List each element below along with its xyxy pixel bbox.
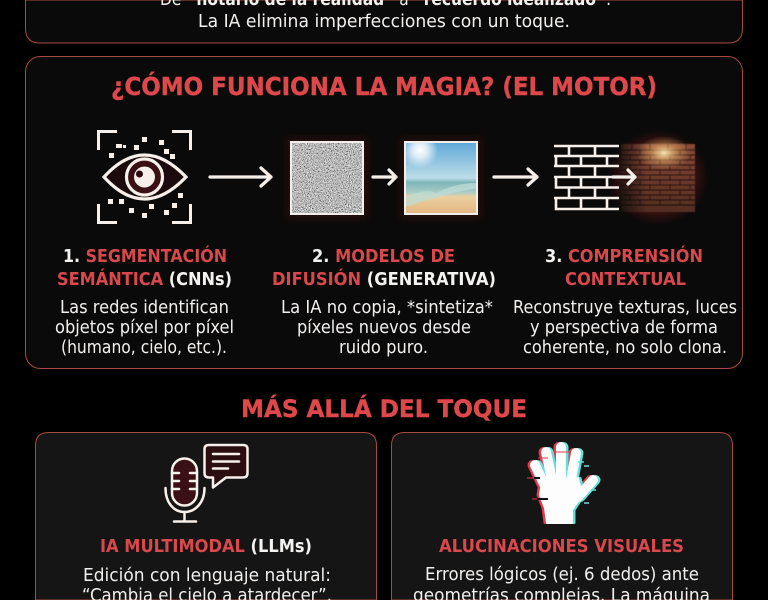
multimodal description: Edición con lenguaje natural: (83, 566, 331, 586)
heading: how it works: ¿CÓMO FUNCIONA LA MAGIA? (EL MOTOR) (111, 71, 657, 101)
step 3 description: coherente, no solo clona. (523, 338, 727, 358)
step 2 heading (272, 247, 496, 290)
step 2 description (281, 298, 493, 358)
panel: visual hallucinations (392, 432, 732, 600)
arrow: noise to beach (373, 170, 396, 184)
hallucinations description (413, 565, 710, 600)
step 2 description: La IA no copia, *sintetiza* (281, 298, 493, 318)
step 1 description (55, 298, 234, 358)
step 1 description: objetos píxel por píxel (55, 318, 234, 338)
hallucinations heading: ALUCINACIONES VISUALES (439, 537, 684, 557)
icon: microphone and speech bubble (166, 445, 248, 522)
arrow: beach to bricks (494, 169, 537, 185)
panel: how the magic works (26, 56, 742, 368)
step 3: contextual understanding (513, 245, 737, 358)
multimodal description (82, 566, 332, 600)
hallucinations description: Errores lógicos (ej. 6 dedos) ante (425, 565, 699, 585)
arrow: brick outline to photo (613, 170, 635, 184)
step 1 heading (57, 245, 232, 290)
image: beach (400, 132, 482, 219)
step 1 heading: SEMÁNTICA (CNNs) (57, 268, 232, 290)
panel: top intro (26, 0, 742, 43)
step 3 description: y perspectiva de forma (530, 318, 718, 338)
arrow: eye to noise (210, 168, 271, 186)
image: lit brick wall (608, 130, 708, 225)
step 1 description: (humano, cielo, etc.). (61, 338, 227, 358)
step 1: semantic segmentation (55, 245, 234, 358)
icon: eye scan (98, 132, 190, 222)
step 1 description: Las redes identifican (60, 298, 229, 318)
icon: glitched six-finger hand (527, 447, 596, 523)
step 3 description (513, 298, 737, 358)
step 2 description: ruido puro. (339, 338, 428, 358)
step 3 heading: 3. COMPRENSIÓN (545, 245, 703, 267)
step 3 description: Reconstruye texturas, luces (513, 298, 737, 318)
step 3 heading (545, 245, 703, 290)
step 2 description: píxeles nuevos desde (297, 318, 471, 338)
heading: beyond the touch: MÁS ALLÁ DEL TOQUE (241, 394, 527, 423)
step 2 heading: 2. MODELOS DE (312, 247, 455, 267)
image: noise square (286, 137, 368, 219)
step 2: diffusion models (272, 247, 496, 358)
multimodal heading: IA MULTIMODAL (LLMs) (100, 537, 312, 557)
panel: multimodal AI (36, 432, 376, 600)
icon: brick outline (554, 146, 619, 209)
step 3 heading: CONTEXTUAL (565, 270, 686, 290)
step 2 heading: DIFUSIÓN (GENERATIVA) (272, 268, 496, 290)
intro text line 2: La IA elimina imperfecciones con un toque. (198, 12, 570, 32)
step 1 heading: 1. SEGMENTACIÓN (63, 245, 227, 267)
